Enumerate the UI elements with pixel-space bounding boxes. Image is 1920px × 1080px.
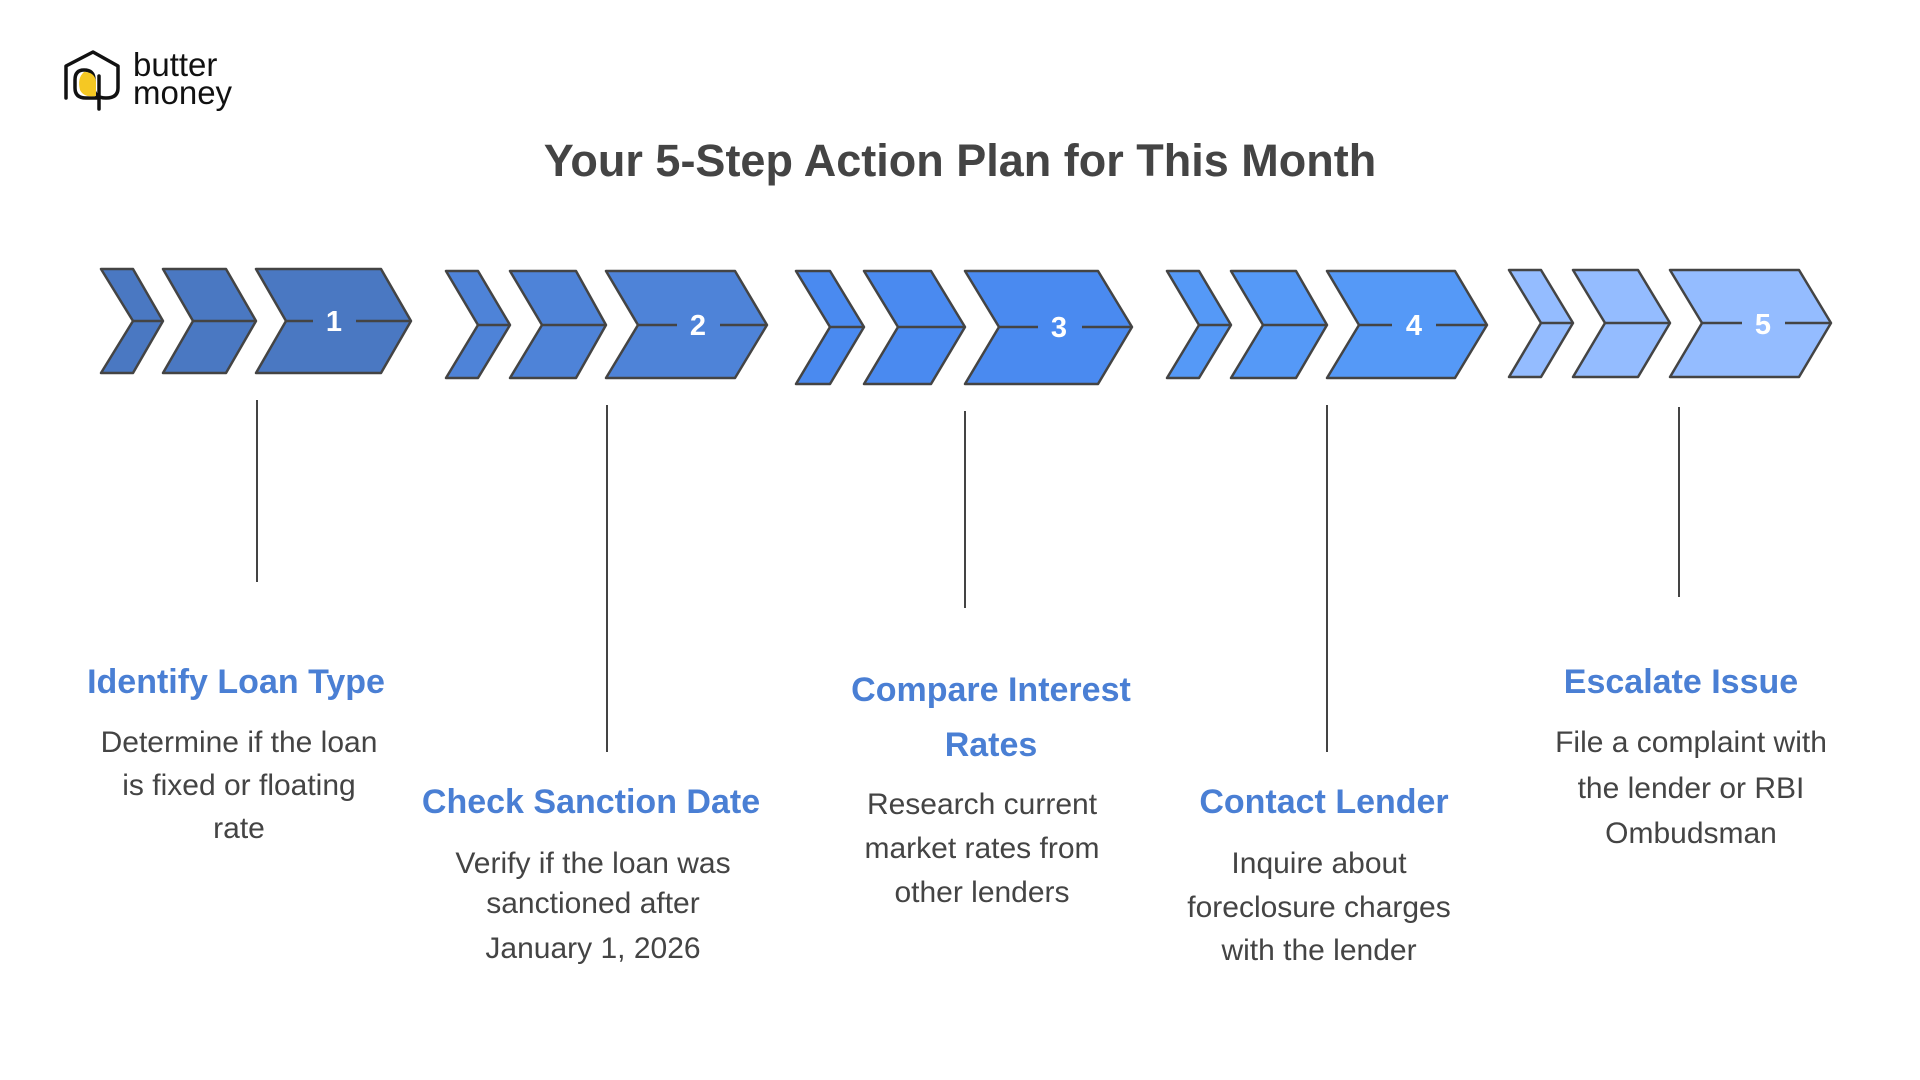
step 3 text: other lenders bbox=[894, 876, 1070, 909]
step 2 text: sanctioned after bbox=[486, 887, 700, 920]
step 4 text: Contact Lender bbox=[1199, 783, 1449, 821]
logo: money bbox=[133, 74, 233, 111]
step 5 text: the lender or RBI bbox=[1578, 772, 1804, 805]
connector lines bbox=[257, 400, 1679, 752]
logo bbox=[66, 46, 233, 111]
step 5 text: Escalate Issue bbox=[1564, 663, 1798, 701]
step 4 text: Inquire about bbox=[1231, 847, 1407, 880]
step 4 text: foreclosure charges bbox=[1187, 891, 1451, 924]
step 2 chevrons: 2 bbox=[690, 310, 706, 342]
step 1 text: Determine if the loan bbox=[101, 726, 377, 759]
step 2 text bbox=[422, 783, 760, 965]
step 2 text: Verify if the loan was bbox=[455, 847, 731, 880]
step 4 text bbox=[1187, 783, 1451, 967]
step 4 chevrons: 4 bbox=[1406, 310, 1422, 342]
step 1 text: rate bbox=[213, 812, 265, 845]
step 2 text: January 1, 2026 bbox=[485, 932, 701, 965]
step 5 text: File a complaint with bbox=[1555, 726, 1827, 759]
step 3 text: Research current bbox=[867, 788, 1098, 821]
step 3 text: market rates from bbox=[864, 832, 1100, 865]
step 5 chevrons: 5 bbox=[1755, 309, 1771, 341]
step 1 chevrons bbox=[101, 269, 411, 373]
step 2 text: Check Sanction Date bbox=[422, 783, 760, 821]
title: Your 5-Step Action Plan for This Month bbox=[544, 135, 1376, 186]
logo: butter bbox=[133, 46, 217, 83]
step 5 text bbox=[1555, 663, 1827, 850]
step 3 chevrons bbox=[796, 271, 1132, 384]
step 5 chevrons bbox=[1509, 270, 1831, 377]
step 4 text: with the lender bbox=[1220, 934, 1417, 967]
step 5 text: Ombudsman bbox=[1605, 817, 1777, 850]
step 4 chevrons bbox=[1167, 271, 1487, 378]
step 2 chevrons bbox=[446, 271, 767, 378]
step 3 text bbox=[851, 671, 1131, 909]
step 3 chevrons: 3 bbox=[1051, 312, 1067, 344]
step 1 chevrons: 1 bbox=[326, 306, 342, 338]
step 1 text: is fixed or floating bbox=[122, 769, 356, 802]
step 3 text: Rates bbox=[945, 726, 1037, 764]
step 3 text: Compare Interest bbox=[851, 671, 1131, 709]
step 1 text: Identify Loan Type bbox=[87, 663, 385, 701]
step 1 text bbox=[87, 663, 385, 845]
